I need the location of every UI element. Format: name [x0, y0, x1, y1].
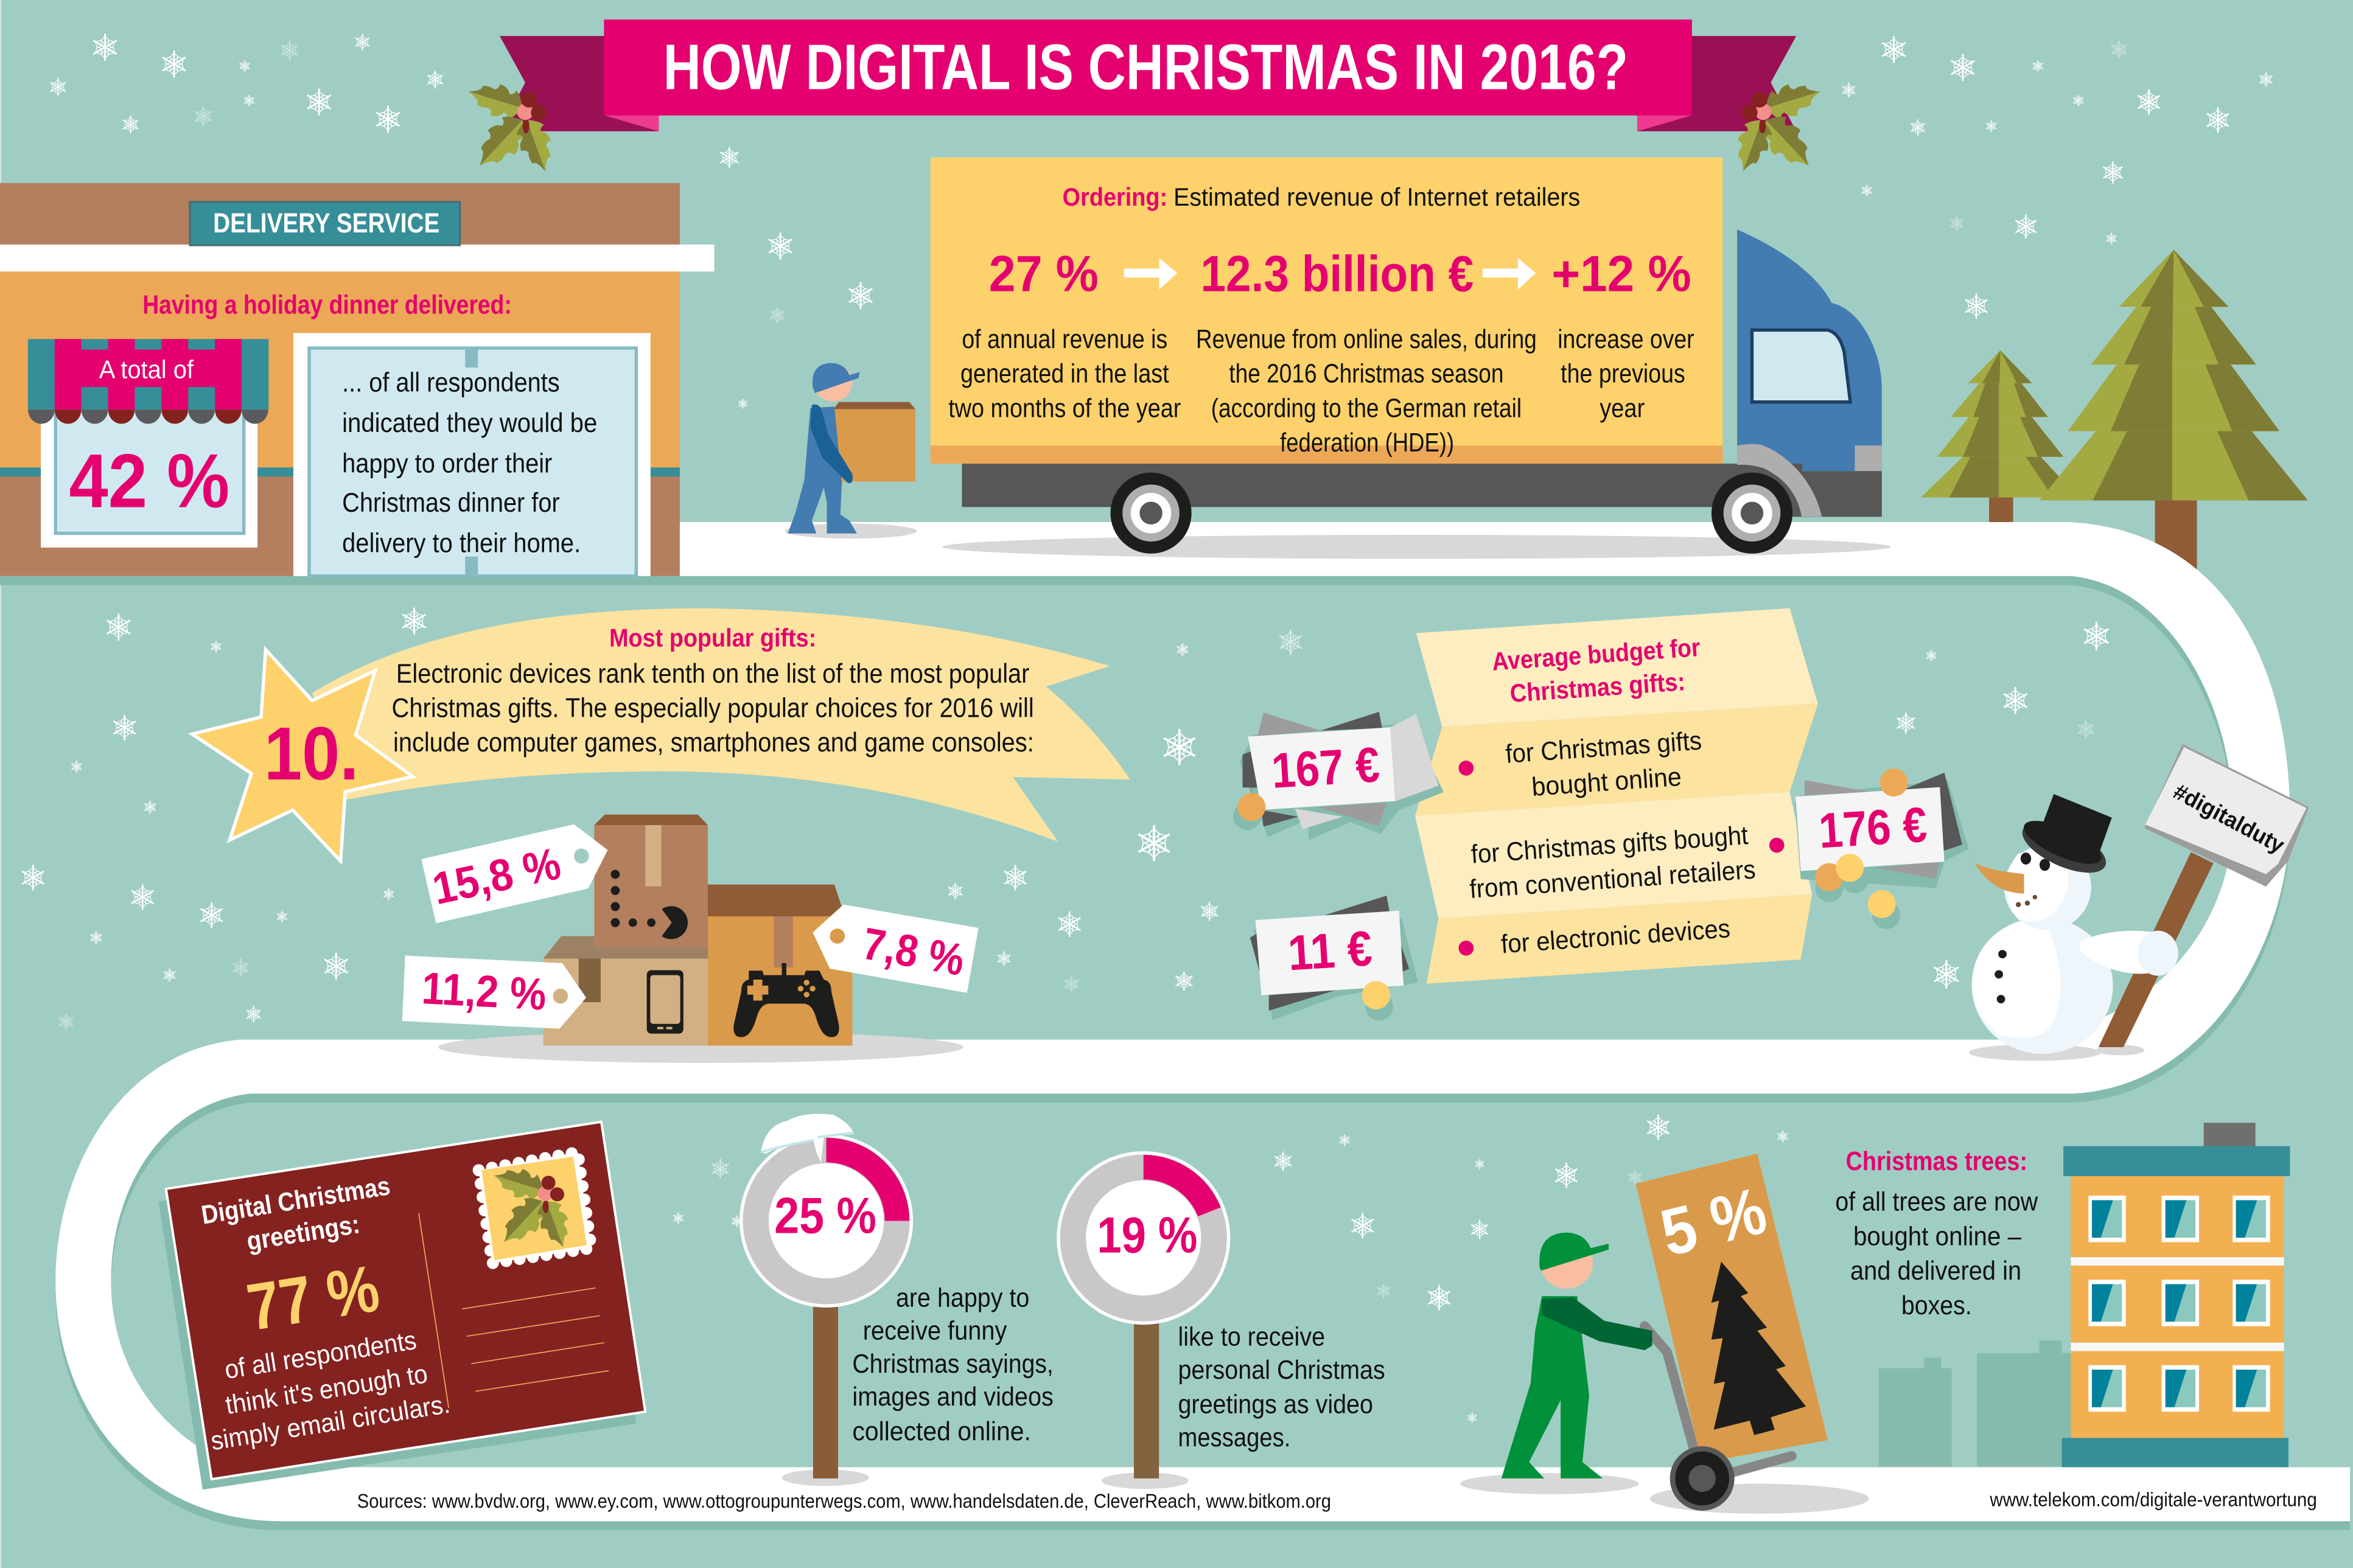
- price tag: 7,8 percent: 7,8 %: [859, 918, 968, 985]
- note: 11 euros: 11 €: [1287, 921, 1374, 981]
- note: 167 euros: [1233, 712, 1444, 840]
- 25 percent value: 25 %: [774, 1187, 876, 1244]
- delivery man with parcel: [785, 363, 917, 538]
- ordering heading: Estimated revenue of Internet retailers: [1173, 183, 1580, 211]
- text: Christmas trees: of all trees are now: [1835, 1188, 2038, 1217]
- price tag: 15,8 percent: [421, 824, 608, 923]
- title banner: [500, 19, 1796, 131]
- text: Christmas trees: and delivered in: [1850, 1256, 2021, 1286]
- right window with text: indicated they would be: [342, 408, 597, 438]
- truck wheels: [1111, 473, 1792, 554]
- snow cap: [761, 1114, 854, 1163]
- shop sign text: DELIVERY SERVICE: [213, 207, 439, 239]
- sign board: #digitalduty: [2170, 779, 2288, 858]
- text: funny sayings: [852, 1284, 1054, 1446]
- column: increase: year: [1600, 394, 1645, 423]
- snowman body: [1972, 845, 2178, 1054]
- arrow: [1483, 258, 1536, 290]
- column: online sales: Revenue from online sales, during: [1196, 325, 1537, 354]
- title: HOW DIGITAL IS CHRISTMAS IN 2016?: [663, 32, 1628, 103]
- text: Christmas trees: Christmas trees:: [1846, 1147, 2027, 1176]
- chart: 19 percent donut sign: [1057, 1151, 1230, 1489]
- awning: [28, 339, 268, 424]
- budget item: conventional retailers: [1469, 821, 1785, 904]
- price tag: 11,2 percent: [402, 956, 586, 1029]
- cart frame: [1645, 1326, 1792, 1479]
- cart wheel: [1670, 1446, 1735, 1511]
- ordering heading: Ordering:: [1063, 183, 1167, 211]
- tree box: 5 %: [1654, 1173, 1774, 1270]
- text: funny sayings: collected online.: [852, 1417, 1031, 1446]
- column: annual revenue: of annual revenue is: [962, 325, 1167, 354]
- column: annual revenue: [948, 325, 1181, 423]
- road shadow: [0, 531, 2350, 1530]
- arrow: [1124, 258, 1177, 290]
- right window with text: happy to order their: [342, 449, 553, 479]
- apartment building: [2062, 1123, 2290, 1467]
- chart: 25 percent donut sign: [739, 1114, 913, 1486]
- gifts text: [392, 659, 1034, 758]
- right window with text: ... of all respondents: [342, 368, 560, 398]
- postcard heading: greetings:: [245, 1210, 362, 1256]
- panel: most popular gifts ribbon: [312, 608, 1130, 841]
- gifts text: Electronic devices rank tenth on the list of the most popular: [396, 659, 1030, 689]
- text: Christmas trees: boxes.: [1901, 1291, 1972, 1320]
- website footer: www.telekom.com/digitale-verantwortung: [1989, 1488, 2317, 1510]
- windows: [2088, 1196, 2270, 1412]
- budget item: online: bought online: [1531, 762, 1682, 802]
- right window with text: delivery to their home.: [342, 528, 581, 558]
- budget item: online: for Christmas gifts: [1505, 726, 1702, 769]
- postcard text: of all respondents: [223, 1326, 419, 1385]
- top hat: [2015, 794, 2113, 883]
- postcard heading: Digital Christmas: [200, 1171, 392, 1230]
- sources footer: Sources: www.bvdw.org, www.ey.com, www.ottogroupunterwegs.com, www.handelsdaten.de, CleverReach, www.bitkom.org: [357, 1490, 1331, 1512]
- orange box with game controller: [708, 885, 852, 1045]
- text: video greetings: [1178, 1323, 1385, 1452]
- 12.3 billion euros: 12.3 billion €: [1200, 245, 1474, 302]
- note: 167 euros: 167 €: [1270, 737, 1381, 799]
- note: 176 euros: [1795, 768, 1969, 929]
- right window with text: Christmas dinner for: [342, 488, 560, 518]
- panel: delivery service shop: [0, 183, 715, 576]
- note: 11 euros: [1250, 896, 1418, 1020]
- text: funny sayings: images and videos: [852, 1382, 1054, 1412]
- budget heading: Christmas gifts:: [1509, 667, 1686, 708]
- shop heading: Having a holiday dinner delivered:: [142, 290, 512, 319]
- background buildings: [1879, 1340, 2072, 1466]
- column: increase: increase over: [1558, 325, 1694, 354]
- gifts text: Christmas gifts. The especially popular choices for 2016 will: [392, 694, 1034, 723]
- text: funny sayings: receive funny: [863, 1317, 1007, 1346]
- text: video greetings: greetings as video: [1178, 1390, 1373, 1420]
- text: Christmas trees: bought online –: [1853, 1222, 2021, 1251]
- plus 12 percent: +12 %: [1551, 245, 1691, 302]
- text: video greetings: messages.: [1178, 1423, 1290, 1452]
- panel: truck cargo box: [931, 158, 1722, 464]
- small fir tree: [1921, 350, 2079, 523]
- panel: average budget folded paper: [1415, 608, 1818, 984]
- column: online sales: federation (HDE)): [1280, 428, 1454, 458]
- stamp: [479, 1152, 591, 1263]
- text: video greetings: personal Christmas: [1178, 1356, 1385, 1385]
- tan box with phone: [544, 936, 708, 1045]
- budget item: conventional retailers: for Christmas gifts bought: [1470, 821, 1749, 869]
- gift boxes: [438, 815, 963, 1063]
- right window with text: [293, 333, 651, 576]
- star with rank 10: 10.: [264, 712, 358, 796]
- budget item: conventional retailers: from conventional retailers: [1469, 855, 1757, 904]
- snowman with sign: [1969, 744, 2309, 1061]
- awning: A total of: [99, 355, 194, 383]
- column: annual revenue: generated in the last: [960, 360, 1169, 389]
- column: online sales: (according to the German retail: [1211, 394, 1522, 423]
- signpost stick: [2099, 852, 2214, 1047]
- column: increase: [1558, 325, 1694, 423]
- panel: postcard digital Christmas greetings: [159, 1122, 645, 1490]
- postcard heading: [200, 1171, 392, 1256]
- worker: [1502, 1233, 1652, 1479]
- postcard text: simply email circulars.: [209, 1390, 452, 1456]
- text: Christmas trees: [1835, 1147, 2038, 1320]
- column: increase: the previous: [1561, 360, 1685, 389]
- delivery truck: [931, 158, 1891, 559]
- icon: holly right: [1729, 76, 1825, 178]
- budget item: electronic devices: for electronic devices: [1500, 914, 1731, 959]
- budget heading: [1491, 633, 1701, 708]
- text: funny sayings: are happy to: [896, 1284, 1029, 1313]
- price tag: 7,8 percent: [813, 905, 979, 993]
- postcard text: think it's enough to: [223, 1359, 430, 1420]
- icon: holly left: [464, 76, 560, 178]
- 77 percent: 77 %: [242, 1251, 384, 1344]
- brown box with pacman: [594, 815, 708, 947]
- text: video greetings: like to receive: [1178, 1323, 1325, 1352]
- budget heading: Average budget for: [1491, 633, 1701, 676]
- left window with 42 percent: [41, 393, 257, 548]
- postcard text: [209, 1326, 452, 1456]
- price tag: 15,8 percent: 15,8 %: [428, 838, 565, 914]
- 27 percent: 27 %: [989, 245, 1099, 302]
- price tag: 11,2 percent: 11,2 %: [421, 963, 548, 1020]
- budget item: online: [1459, 726, 1702, 802]
- text: funny sayings: Christmas sayings,: [852, 1350, 1054, 1379]
- winding snowy road: [0, 522, 2350, 1521]
- column: annual revenue: two months of the year: [948, 394, 1181, 423]
- sign board: [2144, 744, 2309, 887]
- left window with 42 percent: 42 %: [69, 437, 229, 523]
- large fir tree: [2040, 250, 2308, 590]
- tree box: [1635, 1154, 1828, 1463]
- column: online sales: the 2016 Christmas season: [1229, 360, 1503, 389]
- gifts text: include computer games, smartphones and game consoles:: [393, 728, 1034, 758]
- 19 percent value: 19 %: [1097, 1207, 1198, 1264]
- star with rank 10: [192, 650, 413, 861]
- column: online sales: [1196, 325, 1537, 458]
- note: 176 euros: 176 €: [1817, 797, 1928, 859]
- tree delivery man with cart: [1460, 1154, 1869, 1514]
- gifts heading: Most popular gifts:: [609, 624, 816, 652]
